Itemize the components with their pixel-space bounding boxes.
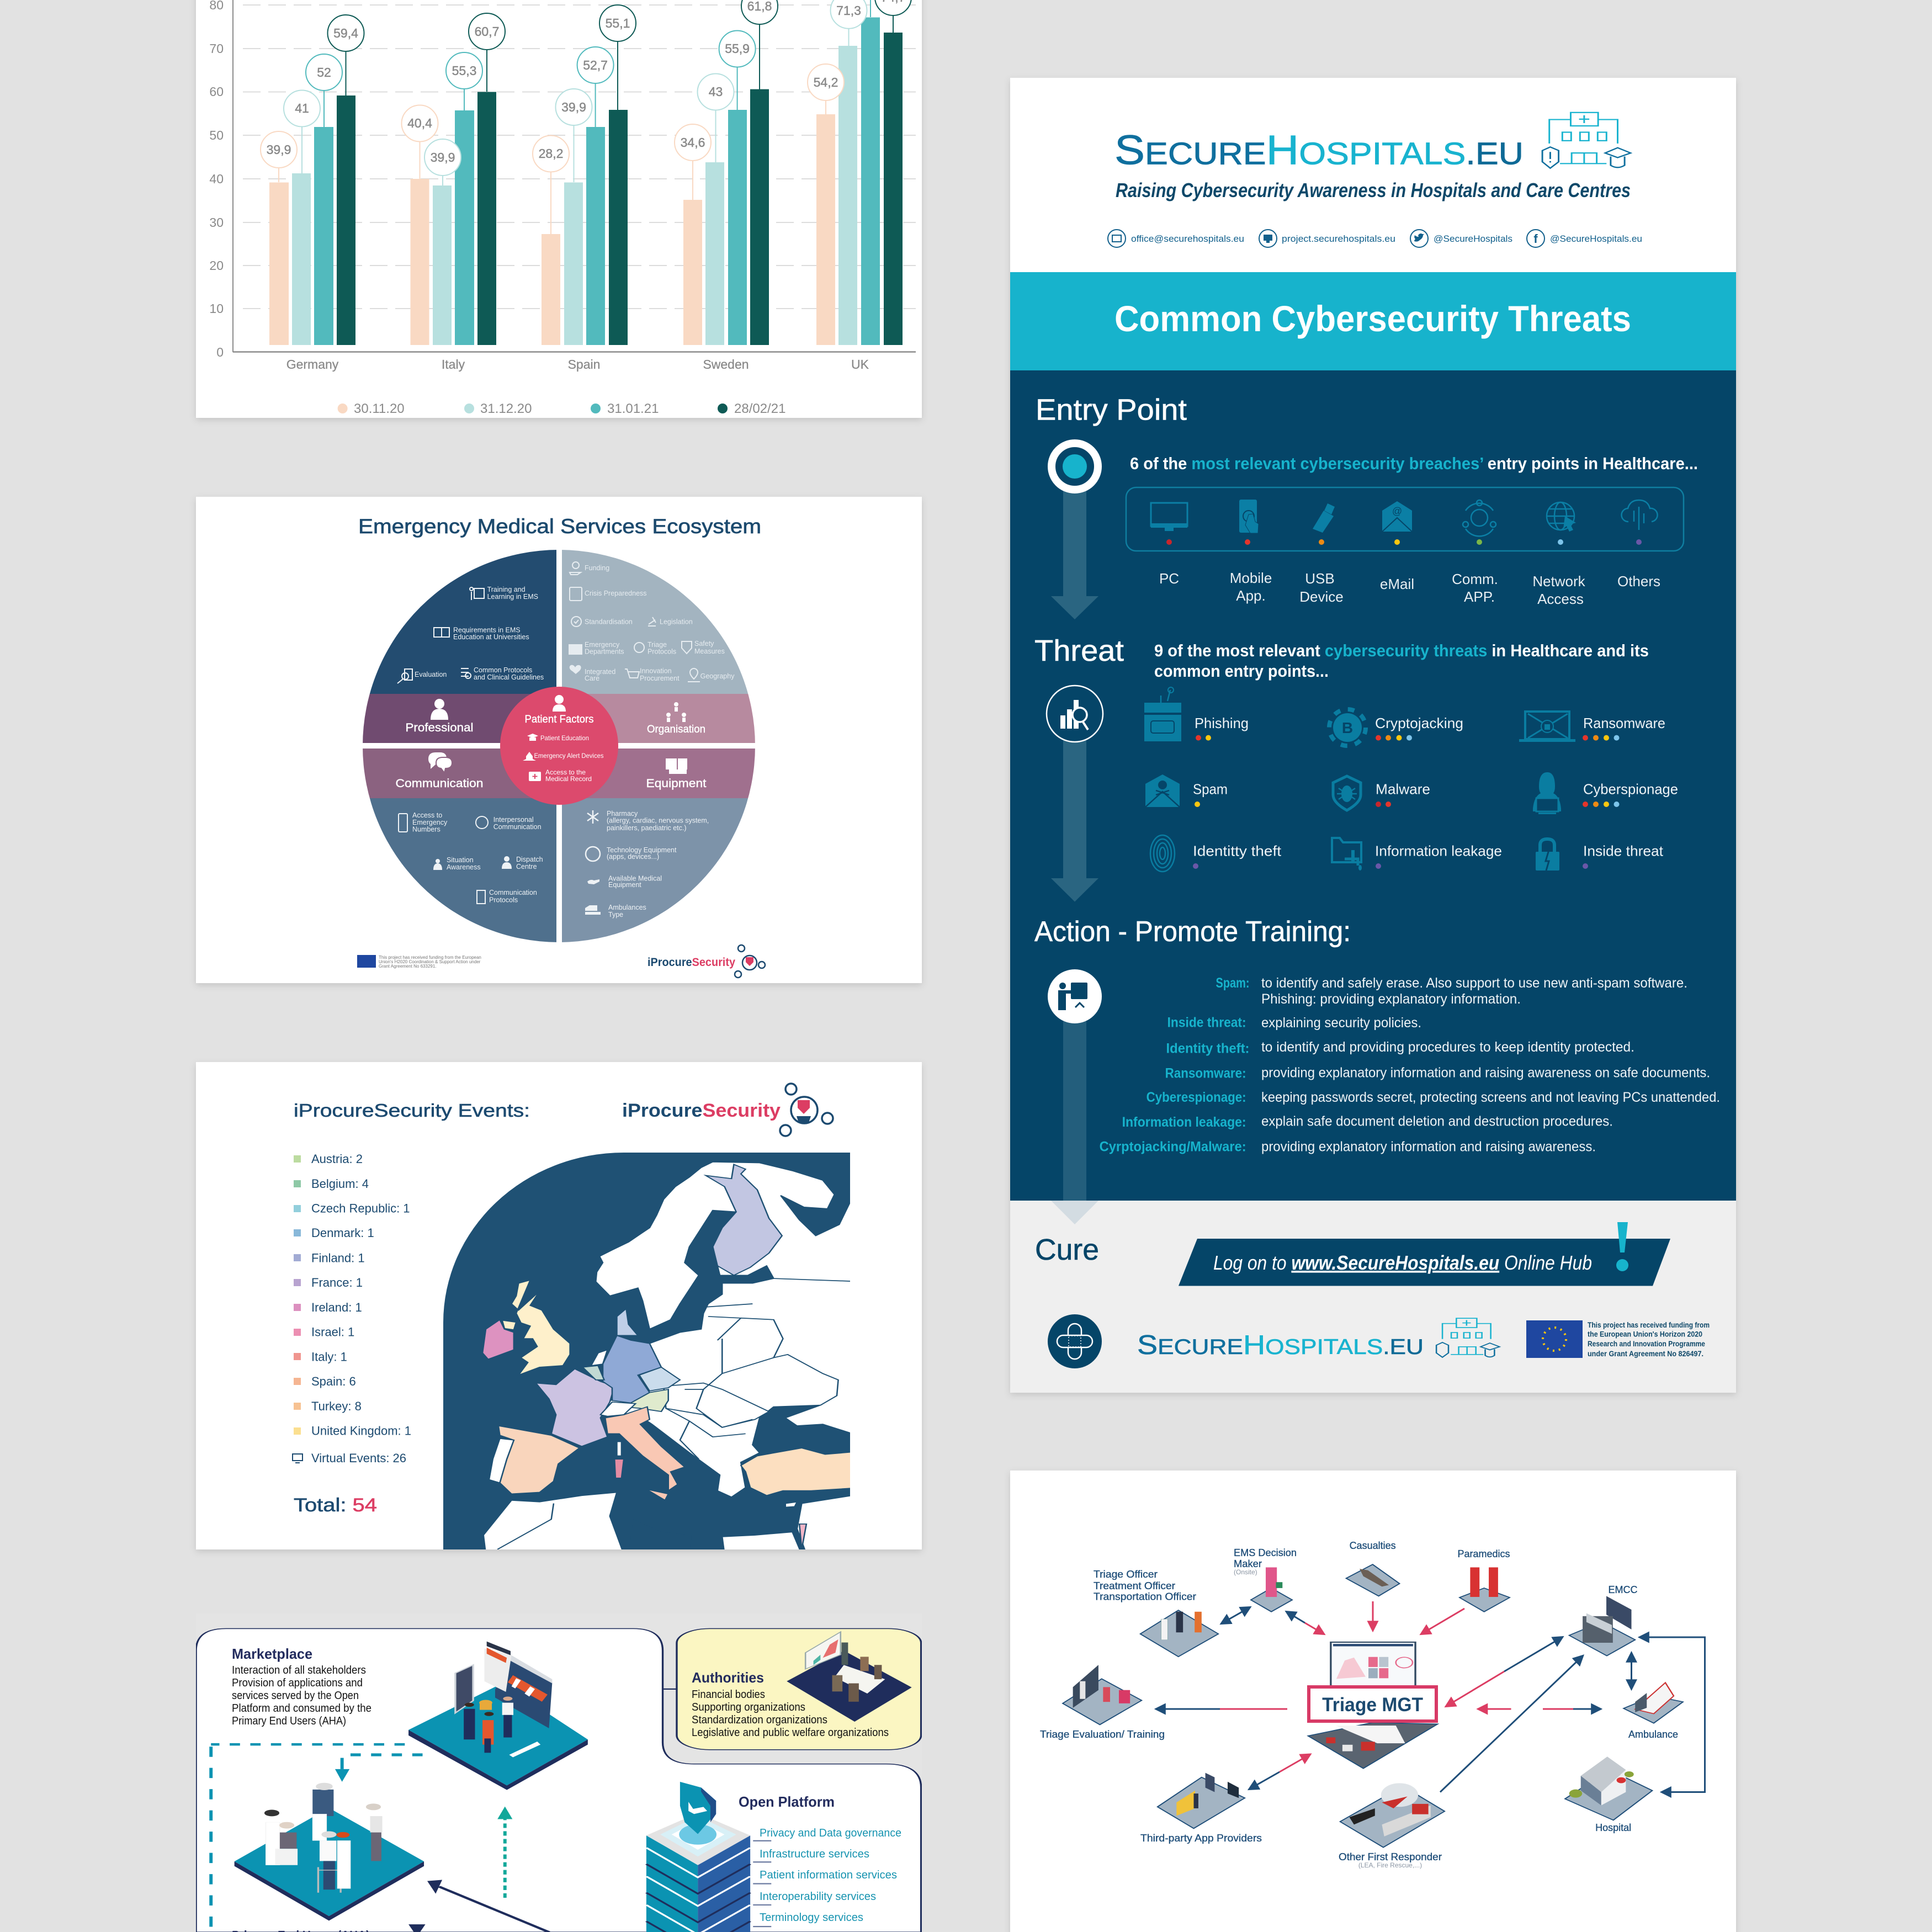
quadrant: Professional items: and Clinical Guidelines [474, 673, 544, 681]
arrow: action to cure [1051, 1021, 1098, 1224]
quadrant: Organisation items: Integrated [585, 668, 615, 676]
dashed connector: marketplace to users [211, 1744, 423, 1932]
stakeholder labels: Triage Officer [1094, 1569, 1158, 1580]
threat: Phishing [1144, 687, 1249, 741]
text: Open Platform: Infrastructure services [760, 1848, 869, 1860]
illustration: marketplace platform [408, 1642, 588, 1790]
entry point labels: Comm. [1452, 571, 1498, 587]
legend of events by country: Ireland: 1 [311, 1301, 362, 1314]
text: Authorities [692, 1669, 889, 1739]
quadrant: Organisation items: Protocols [647, 648, 676, 656]
quadrant: Communication items: Situation [447, 856, 474, 864]
arrow: entry point to threat [1051, 486, 1098, 619]
quadrant: Organisation items: Funding [585, 564, 609, 572]
legend of events by country: France: 1 [311, 1276, 363, 1289]
training action labels: Information leakage: [1122, 1114, 1246, 1130]
value labels: 71,3 [836, 3, 861, 18]
value labels: 55,3 [452, 63, 476, 78]
threat: Information leakage: Information leakage [1375, 842, 1502, 859]
underline dashes [753, 1841, 771, 1926]
training action descriptions: explaining security policies. [1261, 1015, 1421, 1031]
stakeholder labels: Treatment Officer [1094, 1580, 1175, 1591]
total: Total: 54 [294, 1495, 377, 1516]
tagline: Raising Cybersecurity Awareness in Hospitals and Care Centres [1116, 179, 1631, 201]
icon: bandage [1048, 1314, 1102, 1368]
entry point labels: eMail [1380, 576, 1414, 592]
text: Marketplace: Interaction of all stakeholders [232, 1664, 366, 1676]
icon: mobile app [1239, 500, 1259, 545]
value labels: 39,9 [267, 142, 291, 157]
centre circle: Patient Factors: Emergency Alert Devices [534, 752, 604, 760]
quadrant: Organisation items: Departments [585, 648, 624, 656]
value labels: 59,4 [333, 26, 358, 40]
threat: Ransomware: Ransomware [1583, 715, 1665, 731]
training action descriptions: providing explanatory information and raising awareness on safe documents. [1261, 1065, 1710, 1081]
value labels: 60,7 [475, 24, 499, 39]
value labels: 41 [295, 101, 309, 115]
value labels: 55,1 [606, 16, 630, 30]
threat: Malware [1333, 776, 1430, 810]
banner: Common Cybersecurity Threats [1010, 272, 1736, 370]
legend: 28/02/21 [734, 401, 785, 416]
text: Marketplace: Primary End Users (AHA) [232, 1715, 346, 1727]
quadrant: Organisation items: Legislation [660, 618, 693, 626]
officers [1161, 1612, 1202, 1640]
platform illustrations [1063, 1564, 1683, 1848]
legend: 31.12.20 [480, 401, 532, 416]
text: Authorities: Standardization organizations [692, 1714, 827, 1726]
infographic collage canvas [194, 0, 1738, 1932]
threat: Spam: Spam [1193, 781, 1228, 798]
training action descriptions: providing explanatory information and raising awareness. [1261, 1139, 1596, 1155]
text: Open Platform: Interoperability services [760, 1891, 876, 1903]
heading: Action - Promote Training: Action - Promote Training: [1034, 916, 1351, 948]
card: Marketplace and Open Platform background [196, 1628, 921, 1932]
callout: online hub banner: Log on to www.SecureHospitals.eu Online Hub [1213, 1251, 1592, 1274]
entry point labels: Others [1617, 573, 1660, 590]
illustration: meeting room [787, 1632, 912, 1722]
training action descriptions: keeping passwords secret, protecting screens and not leaving PCs unattended. [1261, 1090, 1720, 1105]
threat intro [1154, 641, 1649, 681]
text: Open Platform: Patient information services [760, 1869, 897, 1881]
country labels: Sweden [703, 357, 749, 371]
quadrant: Organisation items: Innovation [640, 667, 672, 675]
text: Authorities: Authorities [692, 1669, 764, 1686]
icon: network access [1547, 502, 1576, 545]
icon: PC [1151, 503, 1187, 545]
panel: Triage MGT ecosystem [1010, 1471, 1736, 1932]
band labels [395, 721, 707, 790]
quadrant: Communication items: Access to [412, 811, 442, 819]
country labels: UK [851, 357, 869, 371]
quadrant: Equipment items: Equipment [608, 881, 641, 889]
contact links: f [1533, 232, 1538, 246]
threat: Inside threat: Inside threat [1583, 842, 1664, 859]
heading: Threat: Threat [1034, 634, 1124, 667]
icon: email [1382, 501, 1412, 545]
stakeholder labels: EMS Decision [1234, 1547, 1297, 1558]
entry point labels: Access [1537, 591, 1584, 607]
contact links: project.securehospitals.eu [1282, 233, 1395, 244]
training action descriptions: explain safe document deletion and destruction procedures. [1261, 1114, 1613, 1129]
quadrant: Professional items: Training and [487, 586, 526, 593]
quadrant: Communication items: Interpersonal [493, 816, 534, 824]
entry point labels [1159, 570, 1660, 607]
threat: Malware: Malware [1376, 781, 1430, 798]
icon: USB device [1313, 503, 1335, 545]
logo: iProcureSecurity [622, 1084, 833, 1136]
map of Europe [443, 1153, 863, 1554]
ecosystem wheel [359, 546, 760, 947]
value labels: 40,4 [407, 116, 432, 130]
country labels: Italy [442, 357, 465, 371]
text: Marketplace: Marketplace [232, 1646, 312, 1662]
quadrant: Equipment items: Available Medical [608, 874, 662, 882]
quadrant: Communication items [399, 811, 543, 904]
training action descriptions: to identify and providing procedures to keep identity protected. [1261, 1039, 1634, 1055]
text: Authorities: Financial bodies [692, 1689, 765, 1701]
text: Open Platform [739, 1793, 901, 1924]
value labels: 52,7 [583, 58, 608, 72]
y axis labels [209, 0, 224, 359]
quadrant: Organisation items: Procurement [640, 675, 680, 682]
value labels: 54,2 [814, 75, 838, 89]
y axis labels: 0 [216, 345, 224, 359]
EU funding note: Union's H2020 Coordination & Support Action under [379, 959, 481, 964]
band labels: Organisation [647, 724, 705, 735]
heading: Entry Point: Entry Point [1036, 393, 1187, 426]
text: Open Platform: Open Platform [739, 1793, 835, 1810]
stakeholder labels: Paramedics [1457, 1548, 1510, 1559]
quadrant: Professional items [397, 586, 544, 683]
legend: 31.01.21 [607, 401, 659, 416]
text: Marketplace [232, 1646, 371, 1727]
quadrant: Communication items: Emergency [412, 819, 448, 826]
legend of events by country: Austria: 2 [311, 1152, 363, 1166]
stakeholder labels: Triage Evaluation/ Training [1040, 1729, 1165, 1740]
centre circle: Patient Factors: Medical Record [545, 775, 592, 783]
EU funding note: Research and Innovation Programme [1588, 1339, 1705, 1348]
icon: footer hospital logo [1436, 1318, 1500, 1357]
entry point labels: Mobile [1230, 570, 1272, 586]
stakeholder labels: Maker [1234, 1558, 1262, 1569]
centre circle: Patient Factors: Patient Education [540, 734, 589, 742]
stakeholder labels: Transportation Officer [1094, 1591, 1196, 1602]
value bubbles [261, 0, 911, 176]
centre circle: Patient Factors: Access to the [545, 768, 586, 776]
quadrant: Equipment items: painkillers, paediatric etc.) [607, 824, 687, 832]
quadrant: Communication items: Communication [489, 889, 537, 896]
quadrant: Organisation items: Crisis Preparedness [585, 590, 647, 597]
quadrant: Professional items: Requirements in EMS [453, 626, 521, 634]
ambulance [1635, 1682, 1674, 1714]
heading: iProcureSecurity Events: [294, 1100, 530, 1121]
quadrant: Communication items: Protocols [489, 896, 518, 904]
value labels: 39,9 [431, 150, 455, 164]
entry point intro: 6 of the most relevant cybersecurity breaches’ entry points in Healthcare... [1130, 454, 1698, 473]
legend of events by country: Czech Republic: 1 [311, 1201, 410, 1216]
training action descriptions: Phishing: providing explanatory information. [1261, 991, 1521, 1007]
legend of events by country: Belgium: 4 [311, 1177, 369, 1191]
text: Authorities: Legislative and public welfare organizations [692, 1727, 889, 1739]
y axis labels: 70 [209, 41, 224, 56]
contact links: office@securehospitals.eu [1131, 233, 1244, 244]
threat: Information leakage [1332, 838, 1502, 871]
country labels [286, 357, 869, 371]
bars: 31.12.20 [292, 46, 857, 345]
band labels: Professional [405, 721, 474, 734]
quadrant: Professional items: Learning in EMS [487, 593, 538, 601]
icon: email: @ [1392, 506, 1402, 517]
EU funding note [357, 955, 481, 969]
quadrant: Organisation items: Geography [700, 672, 735, 680]
training action labels: Cyberespionage: [1147, 1090, 1246, 1105]
text: Authorities: Supporting organizations [692, 1701, 805, 1713]
EU flag [1526, 1320, 1583, 1358]
quadrant: Organisation items: Triage [647, 641, 667, 649]
legend of events by country [293, 1152, 411, 1465]
quadrant: Organisation items: Safety [694, 640, 714, 647]
threat: Inside threat [1536, 839, 1664, 871]
value labels: 55,9 [725, 41, 750, 56]
entry point labels: Network [1532, 573, 1586, 590]
training action labels: Spam: [1216, 975, 1250, 991]
quadrant: Equipment items: (allergy, cardiac, nervous system, [607, 817, 709, 825]
leader lines [279, 0, 893, 234]
threat intro: common entry points... [1154, 661, 1329, 681]
value labels: 43 [709, 84, 723, 99]
heading: Cure: Cure [1035, 1233, 1099, 1266]
card shadows [196, 0, 1736, 1932]
legend of events by country: Denmark: 1 [311, 1226, 374, 1240]
text: Open Platform: Privacy and Data governance [760, 1827, 901, 1839]
quadrant: Equipment items: Pharmacy [607, 810, 638, 818]
training action labels: Inside threat: [1167, 1015, 1246, 1030]
training action labels [1100, 975, 1250, 1155]
quadrant: Organisation items: Emergency [585, 641, 620, 649]
threat intro: 9 of the most relevant cybersecurity threats in Healthcare and its [1154, 641, 1649, 660]
threat: Spam [1145, 774, 1228, 807]
entry point labels: Device [1299, 588, 1344, 605]
stakeholder labels: EMCC [1609, 1584, 1637, 1595]
text: Marketplace: Provision of applications and [232, 1677, 363, 1689]
threat: Identitty theft: Identitty theft [1193, 842, 1282, 859]
legend of events by country: Italy: 1 [311, 1350, 347, 1363]
EU funding note: Grant Agreement No 633291. [379, 964, 437, 969]
threat: Cyberspionage: Cyberspionage [1583, 781, 1678, 798]
band labels: Equipment [646, 777, 707, 790]
stakeholder labels: Hospital [1595, 1822, 1631, 1833]
entry point labels: APP. [1464, 588, 1495, 605]
entry point labels: USB [1305, 570, 1335, 587]
panel: Emergency Medical Services Ecosystem [196, 497, 922, 983]
callout: online hub banner [1179, 1222, 1670, 1286]
illustration: primary end users platform [235, 1783, 424, 1920]
logo: SecureHospitals.eu wordmark: SECURE HOSPITALS .EU [1114, 127, 1524, 173]
arrows between stakeholders [1156, 1601, 1705, 1792]
quadrant: Organisation items: Measures [694, 647, 725, 655]
threat: Cryptojacking [1329, 709, 1463, 746]
quadrant: Equipment items: Type [608, 911, 623, 919]
panel: SecureHospitals cybersecurity threats poster [1010, 78, 1736, 1393]
quadrant: Professional items: Evaluation [415, 671, 447, 678]
stakeholder labels: (LEA, Fire Rescue,...) [1358, 1861, 1422, 1869]
centre circle: Patient Factors: Patient Factors [524, 714, 594, 725]
country labels: Germany [286, 357, 339, 371]
casualty [1360, 1569, 1389, 1586]
quadrant: Communication items: Communication [493, 823, 542, 831]
band icons [428, 699, 687, 774]
banner: Common Cybersecurity Threats: Common Cybersecurity Threats [1114, 298, 1631, 339]
value labels: 52 [317, 65, 331, 79]
legend: 30.11.20 [354, 401, 405, 416]
band labels: Communication [395, 777, 484, 790]
training action descriptions: to identify and safely erase. Also support to use new anti-spam software. [1261, 975, 1687, 991]
training room [1073, 1665, 1130, 1708]
third-party screens [1176, 1773, 1239, 1816]
threat: Cryptojacking: Cryptojacking [1375, 715, 1463, 731]
stakeholder labels: Ambulance [1628, 1729, 1678, 1740]
EU funding note: under Grant Agreement No 826497. [1588, 1349, 1703, 1358]
contact links [1108, 230, 1642, 247]
icon: communication app [1463, 500, 1496, 545]
quadrant: Professional items: Common Protocols [474, 666, 532, 674]
stakeholder labels: (Onsite) [1234, 1568, 1257, 1576]
legend [338, 401, 785, 416]
training action descriptions [1261, 975, 1720, 1155]
quadrant: Communication items: Numbers [412, 826, 440, 834]
quadrant: Communication items: Dispatch [516, 856, 543, 863]
training action labels: Ransomware: [1165, 1065, 1246, 1081]
EU funding note: This project has received funding from [1588, 1320, 1710, 1329]
EU funding note: This project has received funding from the European [379, 955, 481, 960]
arrow: open platform to users [408, 1880, 549, 1932]
legend of events by country: Finland: 1 [311, 1251, 365, 1265]
icon: hospital logo [1542, 113, 1631, 168]
logo: iProcureSecurity [647, 945, 765, 978]
paramedics [1470, 1567, 1498, 1597]
quadrant: Equipment items: (apps, devices...) [607, 853, 659, 861]
value labels: 34,6 [681, 135, 705, 150]
panel: bar chart of countries [196, 0, 922, 418]
legend of events by country: United Kingdom: 1 [311, 1424, 411, 1437]
bars: 31.01.21 [314, 18, 880, 345]
road scene [1326, 1726, 1405, 1751]
training action labels: Identity theft: [1166, 1041, 1250, 1057]
text: Marketplace: Platform and consumed by the [232, 1702, 371, 1715]
logo: iProcureSecurity: iProcureSecurity [647, 956, 735, 969]
card: Authorities background [677, 1628, 921, 1750]
y axis labels: 10 [209, 301, 224, 316]
y axis labels: 30 [209, 215, 224, 230]
value labels [267, 0, 905, 164]
threat: Ransomware [1519, 712, 1665, 742]
EMCC control room [1583, 1596, 1631, 1643]
arrow: threat to action [1051, 740, 1098, 902]
heading: Emergency Medical Services Ecosystem [358, 515, 761, 538]
bars: 30.11.20 [269, 114, 835, 345]
legend of events by country: Israel: 1 [311, 1325, 354, 1339]
value labels: 39,9 [561, 100, 586, 114]
legend of events by country: Virtual Events: 26 [311, 1451, 406, 1465]
threat: Phishing: Phishing [1195, 715, 1249, 731]
threat: Cryptojacking: B [1342, 719, 1353, 736]
quadrant: Organisation items [569, 562, 735, 682]
triage dashboard [1331, 1642, 1415, 1686]
contact links: @SecureHospitals.eu [1550, 233, 1642, 244]
illustration: open platform stack [646, 1782, 750, 1932]
panel: iProcureSecurity Events [196, 1062, 922, 1554]
bars: 28/02/21 [337, 33, 903, 345]
threat: Identitty theft [1150, 835, 1282, 872]
legend of events by country: Spain: 6 [311, 1374, 356, 1388]
entry point icons box [1126, 487, 1684, 551]
icon: other cloud [1622, 500, 1658, 545]
entry point labels: App. [1236, 587, 1266, 604]
training action labels: Cyrptojacking/Malware: [1100, 1139, 1246, 1155]
quadrant: Professional items: Education at Universities [453, 633, 529, 641]
quadrant: Communication items: Awareness [447, 863, 481, 871]
icon: threat analysis [1047, 686, 1103, 742]
EU funding note: the European Union's Horizon 2020 [1588, 1329, 1702, 1338]
callout: Triage MGT [1309, 1687, 1436, 1721]
y axis labels: 40 [209, 172, 224, 186]
contact links: @SecureHospitals [1434, 233, 1512, 244]
callout: Triage MGT: Triage MGT [1322, 1694, 1423, 1716]
stakeholder labels: Third-party App Providers [1140, 1833, 1262, 1844]
stakeholder labels: Casualties [1350, 1540, 1396, 1551]
hospital building [1569, 1756, 1634, 1806]
threat: Cyberspionage [1533, 772, 1678, 814]
text: Open Platform: Terminology services [760, 1912, 863, 1924]
EMS decision maker [1266, 1567, 1282, 1597]
logo: iProcureSecurity: iProcureSecurity [622, 1100, 781, 1121]
stakeholder labels: Other First Responder [1339, 1851, 1442, 1862]
quadrant: Equipment items [585, 810, 709, 919]
quadrant: Equipment items: Ambulances [608, 904, 646, 911]
arrow: users to marketplace [497, 1807, 512, 1898]
stakeholder labels [1040, 1540, 1678, 1869]
y axis labels: 60 [209, 84, 224, 99]
country labels: Spain [568, 357, 600, 371]
text: Marketplace: services served by the Open [232, 1690, 359, 1702]
logo: SecureHospitals.eu footer wordmark: SECURE HOSPITALS .EU [1137, 1330, 1424, 1360]
quadrant: Organisation items: Standardisation [585, 618, 633, 626]
icon: entry point target [1052, 443, 1098, 490]
quadrant: Equipment items: Technology Equipment [607, 846, 677, 854]
y axis labels: 20 [209, 258, 224, 273]
panel: stakeholder ecosystem diagram [196, 1613, 922, 1932]
icon: training [1048, 969, 1102, 1023]
EU funding note [1588, 1320, 1710, 1358]
centre circle: Patient Factors [500, 687, 618, 805]
legend of events by country: Turkey: 8 [311, 1399, 362, 1413]
quadrant: Organisation items: Care [585, 675, 599, 682]
entry point labels: PC [1159, 570, 1179, 587]
quadrant: Communication items: Centre [516, 863, 537, 871]
y axis labels: 50 [209, 128, 224, 142]
value labels: 28,2 [539, 146, 563, 161]
first responders [1350, 1783, 1431, 1837]
